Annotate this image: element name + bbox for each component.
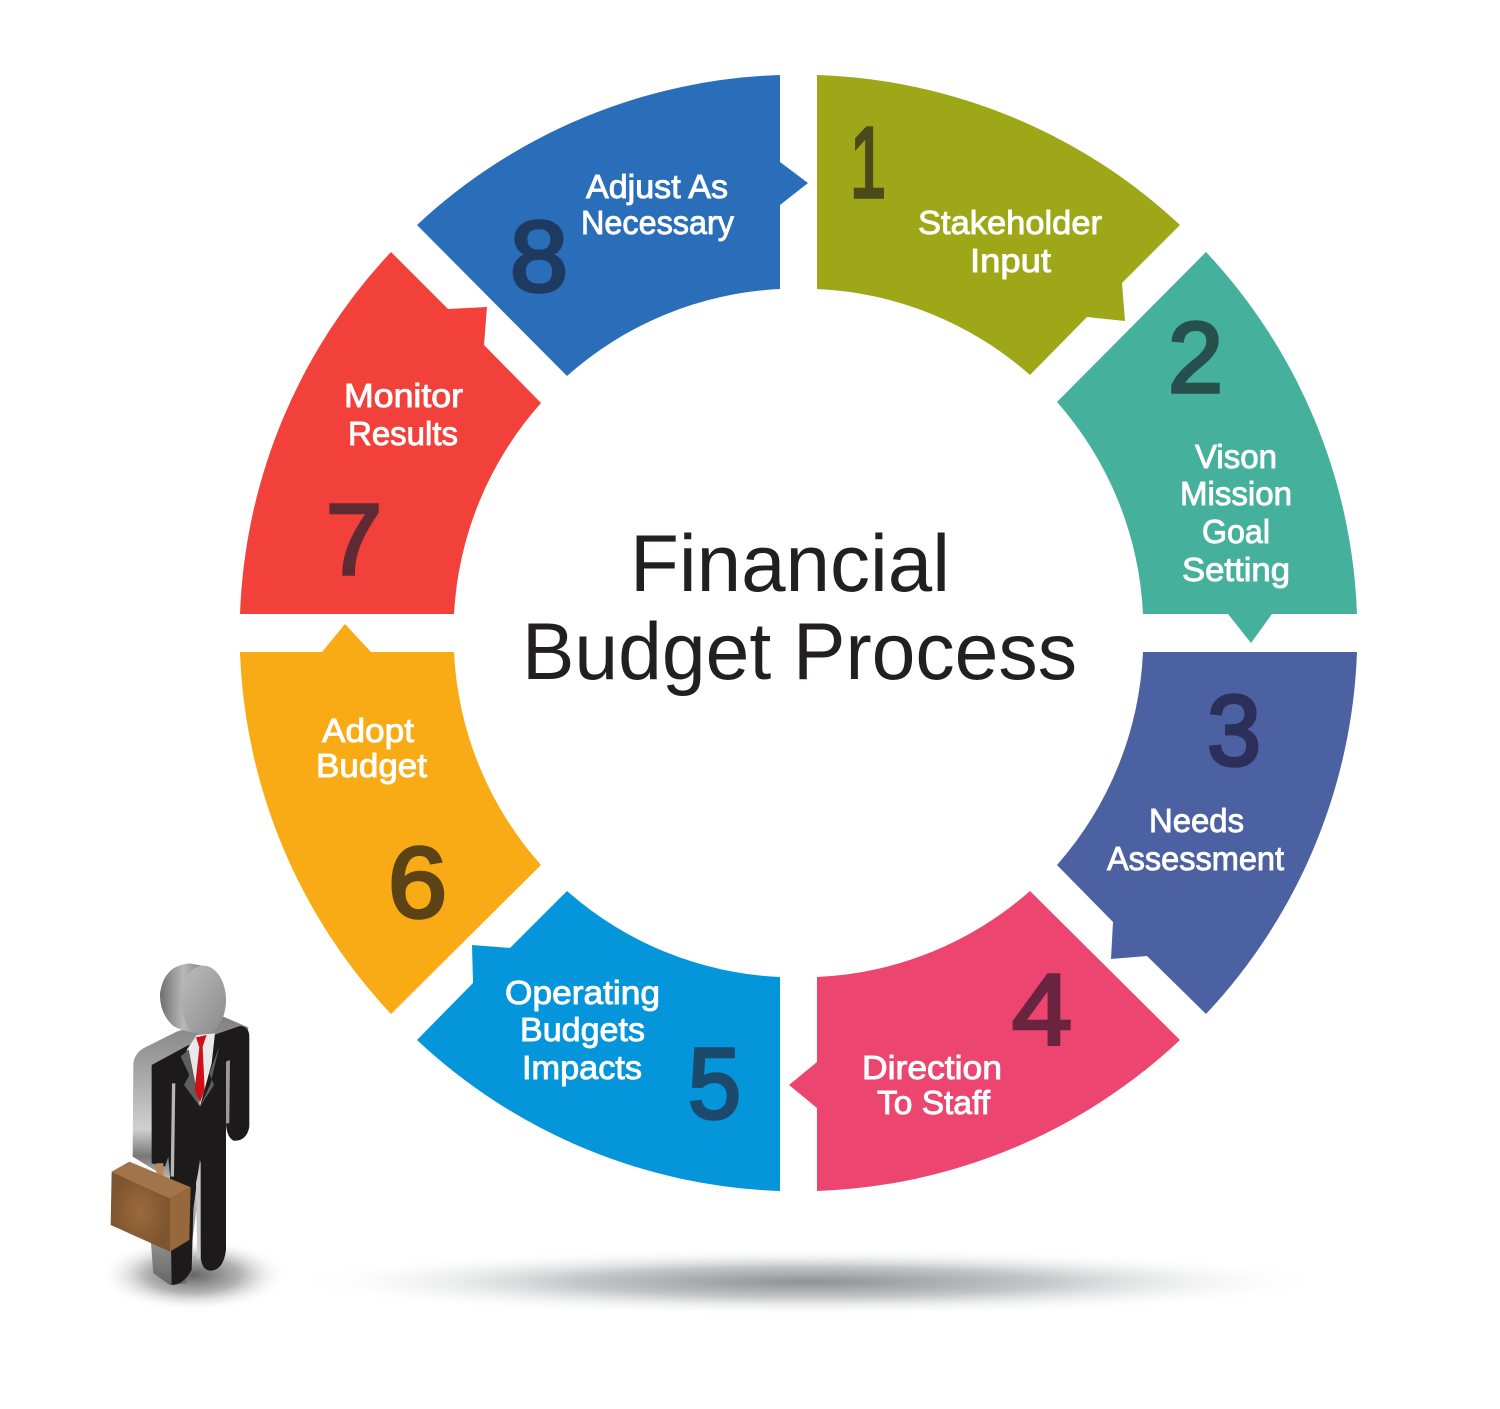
segment 5: operating budgets impacts: 5 [688,1028,741,1140]
segment 7: monitor results: Results [348,415,458,452]
segment 1: stakeholder input: 1 [850,107,886,219]
icon: businessman with briefcase [98,963,288,1312]
segment 3: needs assessment: Needs [1149,802,1244,839]
segment 5: operating budgets impacts: Operating [505,974,660,1011]
segment 2: vision mission goal setting: 2 [1168,302,1223,414]
segment 3: needs assessment [1057,652,1357,1014]
segment 3: needs assessment: Assessment [1107,840,1284,877]
segment 2: vision mission goal setting: Mission [1180,475,1292,512]
segment 4: direction to staff: To Staff [877,1084,991,1121]
segment 5: operating budgets impacts: Budgets [520,1011,645,1048]
title: Budget Process [522,607,1077,697]
segment 5: operating budgets impacts: Impacts [522,1049,642,1086]
segment 8: adjust as necessary: Adjust As [586,168,728,205]
segment 8: adjust as necessary: Necessary [581,204,734,241]
segment 7: monitor results [240,252,541,614]
segment 2: vision mission goal setting: Setting [1182,551,1290,588]
segment 2: vision mission goal setting: Vison [1195,438,1277,475]
segment 4: direction to staff [789,891,1180,1191]
segment 1: stakeholder input: Stakeholder [918,204,1102,241]
segment 1: stakeholder input: Input [970,242,1051,279]
segment 8: adjust as necessary: 8 [510,201,568,313]
title: Financial [630,519,950,609]
segment 4: direction to staff: Direction [862,1049,1002,1086]
segment 2: vision mission goal setting: Goal [1202,513,1270,550]
segment 3: needs assessment: 3 [1207,675,1261,787]
segment 6: adopt budget [240,624,541,1014]
title [522,519,1077,697]
ground shadow [290,1248,1330,1316]
segment 8: adjust as necessary [417,75,808,376]
segment 5: operating budgets impacts [417,891,780,1191]
segment 6: adopt budget: Budget [316,747,427,784]
segment 2: vision mission goal setting [1057,252,1357,643]
segment 7: monitor results: 7 [326,484,382,596]
segment 6: adopt budget: Adopt [322,712,414,749]
segment 6: adopt budget: 6 [388,827,447,939]
segment 1: stakeholder input [817,75,1180,375]
segment 4: direction to staff: 4 [1012,954,1072,1066]
segment 7: monitor results: Monitor [344,377,463,414]
ring diagram [240,75,1357,1191]
